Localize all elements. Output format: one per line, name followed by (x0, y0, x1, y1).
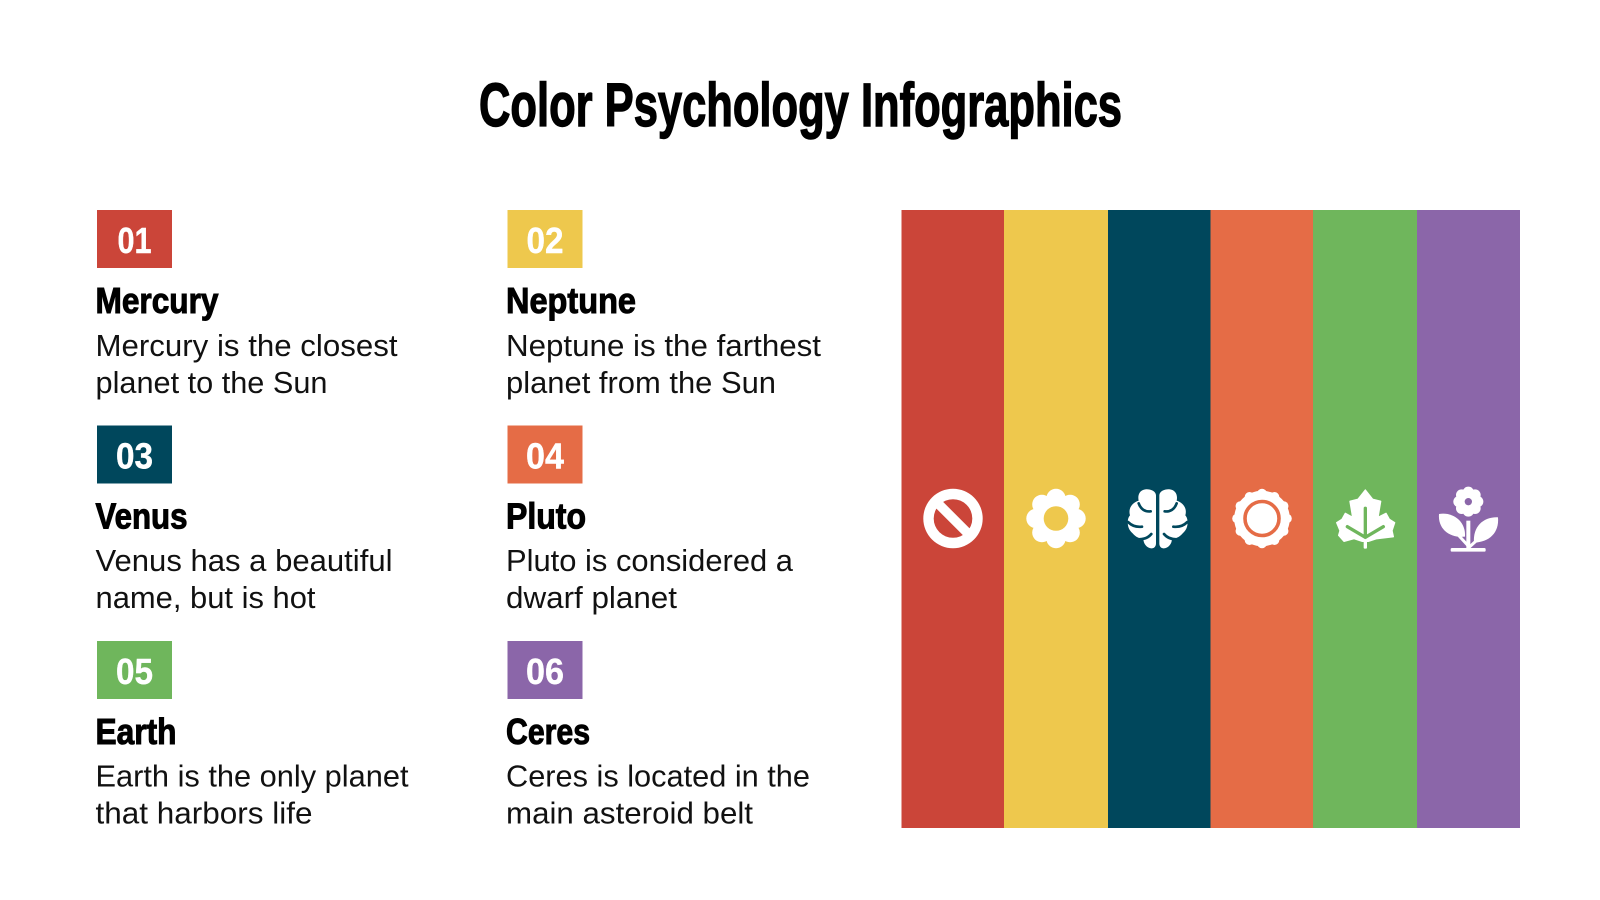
icon: brain (1128, 489, 1188, 548)
heading: Ceres: Ceres (506, 711, 590, 752)
panel: 02 Neptune (506, 210, 822, 400)
heading: Neptune: Neptune (506, 280, 636, 321)
description: Ceres (506, 760, 810, 830)
description: Pluto (506, 544, 793, 615)
description: Pluto: Pluto is considered a (506, 544, 793, 578)
number badge 06: 06 (526, 651, 564, 692)
heading: Mercury: Mercury (96, 280, 218, 321)
icon: maple leaf (1337, 490, 1395, 549)
panel: color stripes (902, 210, 1520, 828)
number badge 05 (97, 641, 172, 699)
description: Earth (96, 760, 409, 830)
heading: Earth: Earth (96, 711, 176, 752)
description: Neptune (506, 329, 822, 400)
description: Ceres: main asteroid belt (506, 796, 754, 830)
number badge 03: 03 (116, 436, 153, 476)
stripe: yellow (1004, 210, 1108, 828)
description: Earth: Earth is the only planet (96, 760, 409, 794)
panel: 05 Earth (96, 641, 409, 830)
description: Venus: name, but is hot (96, 581, 316, 615)
panel: 06 Ceres (506, 641, 810, 830)
stripe: purple (1417, 210, 1520, 828)
number badge 01 (97, 210, 172, 268)
description: Mercury (96, 329, 398, 400)
title: Color Psychology Infographics (479, 71, 1122, 139)
number badge 05: 05 (116, 651, 153, 692)
number badge 03 (97, 426, 172, 484)
description: Venus (96, 544, 392, 615)
icon: potted flower with leaves (1439, 487, 1498, 552)
panel: 03 Venus (96, 426, 392, 615)
icon: prohibition sign (923, 489, 983, 548)
icon: scalloped sun (1232, 489, 1292, 548)
stripe: red (902, 210, 1004, 828)
heading: Pluto: Pluto (506, 496, 586, 536)
stripe: green (1313, 210, 1417, 828)
number badge 02 (508, 210, 582, 268)
number badge 04: 04 (526, 436, 564, 476)
description: Venus: Venus has a beautiful (96, 544, 392, 578)
number badge 01: 01 (118, 220, 152, 261)
panel: 04 Pluto (506, 426, 793, 615)
icon: flower (1026, 489, 1086, 548)
number badge 02: 02 (526, 220, 564, 261)
stripe: navy (1108, 210, 1211, 828)
description: Neptune: planet from the Sun (506, 366, 776, 400)
description: Pluto: dwarf planet (506, 581, 678, 615)
number badge 04 (508, 426, 582, 484)
panel: 01 Mercury (96, 210, 398, 400)
description: Earth: that harbors life (96, 796, 312, 830)
description: Neptune: Neptune is the farthest (506, 329, 822, 363)
description: Mercury: planet to the Sun (96, 366, 328, 400)
stripe: orange (1210, 210, 1314, 828)
description: Mercury: Mercury is the closest (96, 329, 398, 363)
description: Ceres: Ceres is located in the (506, 760, 810, 794)
heading: Venus: Venus (96, 496, 188, 536)
number badge 06 (508, 641, 582, 699)
